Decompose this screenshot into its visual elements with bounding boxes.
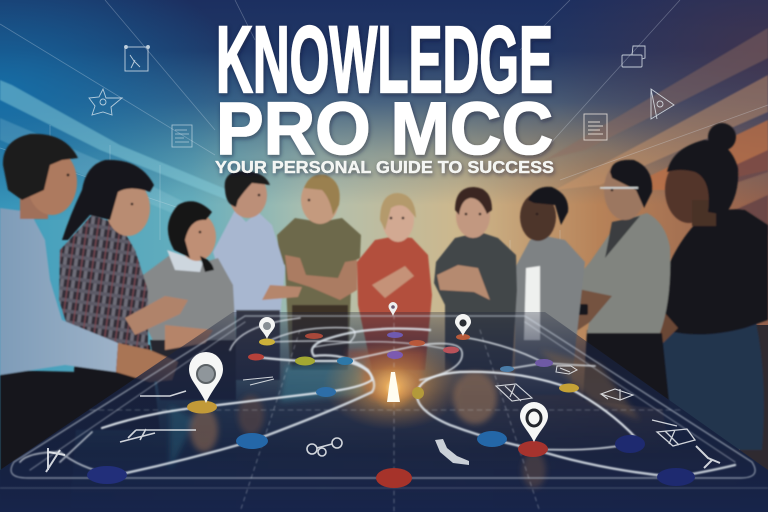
pin: smallest centre [388, 302, 398, 316]
pin: small left [259, 317, 275, 339]
pin: large left [189, 352, 223, 403]
person 3: smiling woman in grey [143, 201, 236, 400]
main left route [102, 357, 372, 428]
icon: grid right [496, 384, 532, 401]
icon: grid left [120, 429, 196, 442]
subtitle: YOUR PERSONAL GUIDE TO SUCCESS [215, 157, 554, 177]
person 5: blond man in olive tee [277, 175, 361, 370]
person 10: woman in black with bun [602, 123, 768, 450]
icon: figure left [46, 448, 65, 472]
icon: scribble [243, 377, 274, 385]
location pins [189, 302, 548, 442]
table outline [11, 316, 755, 478]
icon: document right [584, 114, 607, 140]
icon: folders [622, 46, 645, 67]
pin: large right [520, 402, 548, 442]
heading: PRO MCC: PRO MCC [216, 87, 553, 170]
person 7: woman in dark shirt [434, 187, 517, 370]
icon: chain [307, 438, 342, 456]
main right route [417, 372, 636, 438]
icon: play arrow [651, 89, 674, 119]
route nodes [87, 332, 695, 488]
person faces: eyes and mouths [67, 174, 613, 233]
icon: bar left [140, 391, 186, 396]
title [215, 7, 554, 177]
icon: star [89, 89, 122, 115]
person 6: blonde woman in red [357, 193, 432, 370]
person 8: man in grey cardigan [515, 187, 585, 395]
route network [0, 315, 768, 512]
central perspective guides [240, 315, 540, 512]
icon: card [556, 366, 577, 374]
person 4: man in blue shirt [213, 171, 302, 380]
icon: phone [435, 439, 469, 465]
central glow [323, 340, 463, 430]
icon: desk right [652, 420, 695, 446]
table surface [0, 312, 768, 512]
icon: box right [601, 389, 633, 400]
icon: walker [696, 446, 720, 468]
people group [0, 123, 768, 512]
icon: document left [172, 125, 192, 147]
person 1: man in blue shirt reaching forward [0, 134, 178, 512]
table reflections [170, 350, 640, 488]
person 2: woman in plaid shirt [59, 160, 188, 430]
icon: square with figure [124, 46, 150, 71]
table icons [46, 366, 720, 472]
pin: small right [455, 314, 471, 336]
central light beam [371, 364, 415, 412]
person 9: man in grey sweater and glasses [530, 160, 670, 410]
